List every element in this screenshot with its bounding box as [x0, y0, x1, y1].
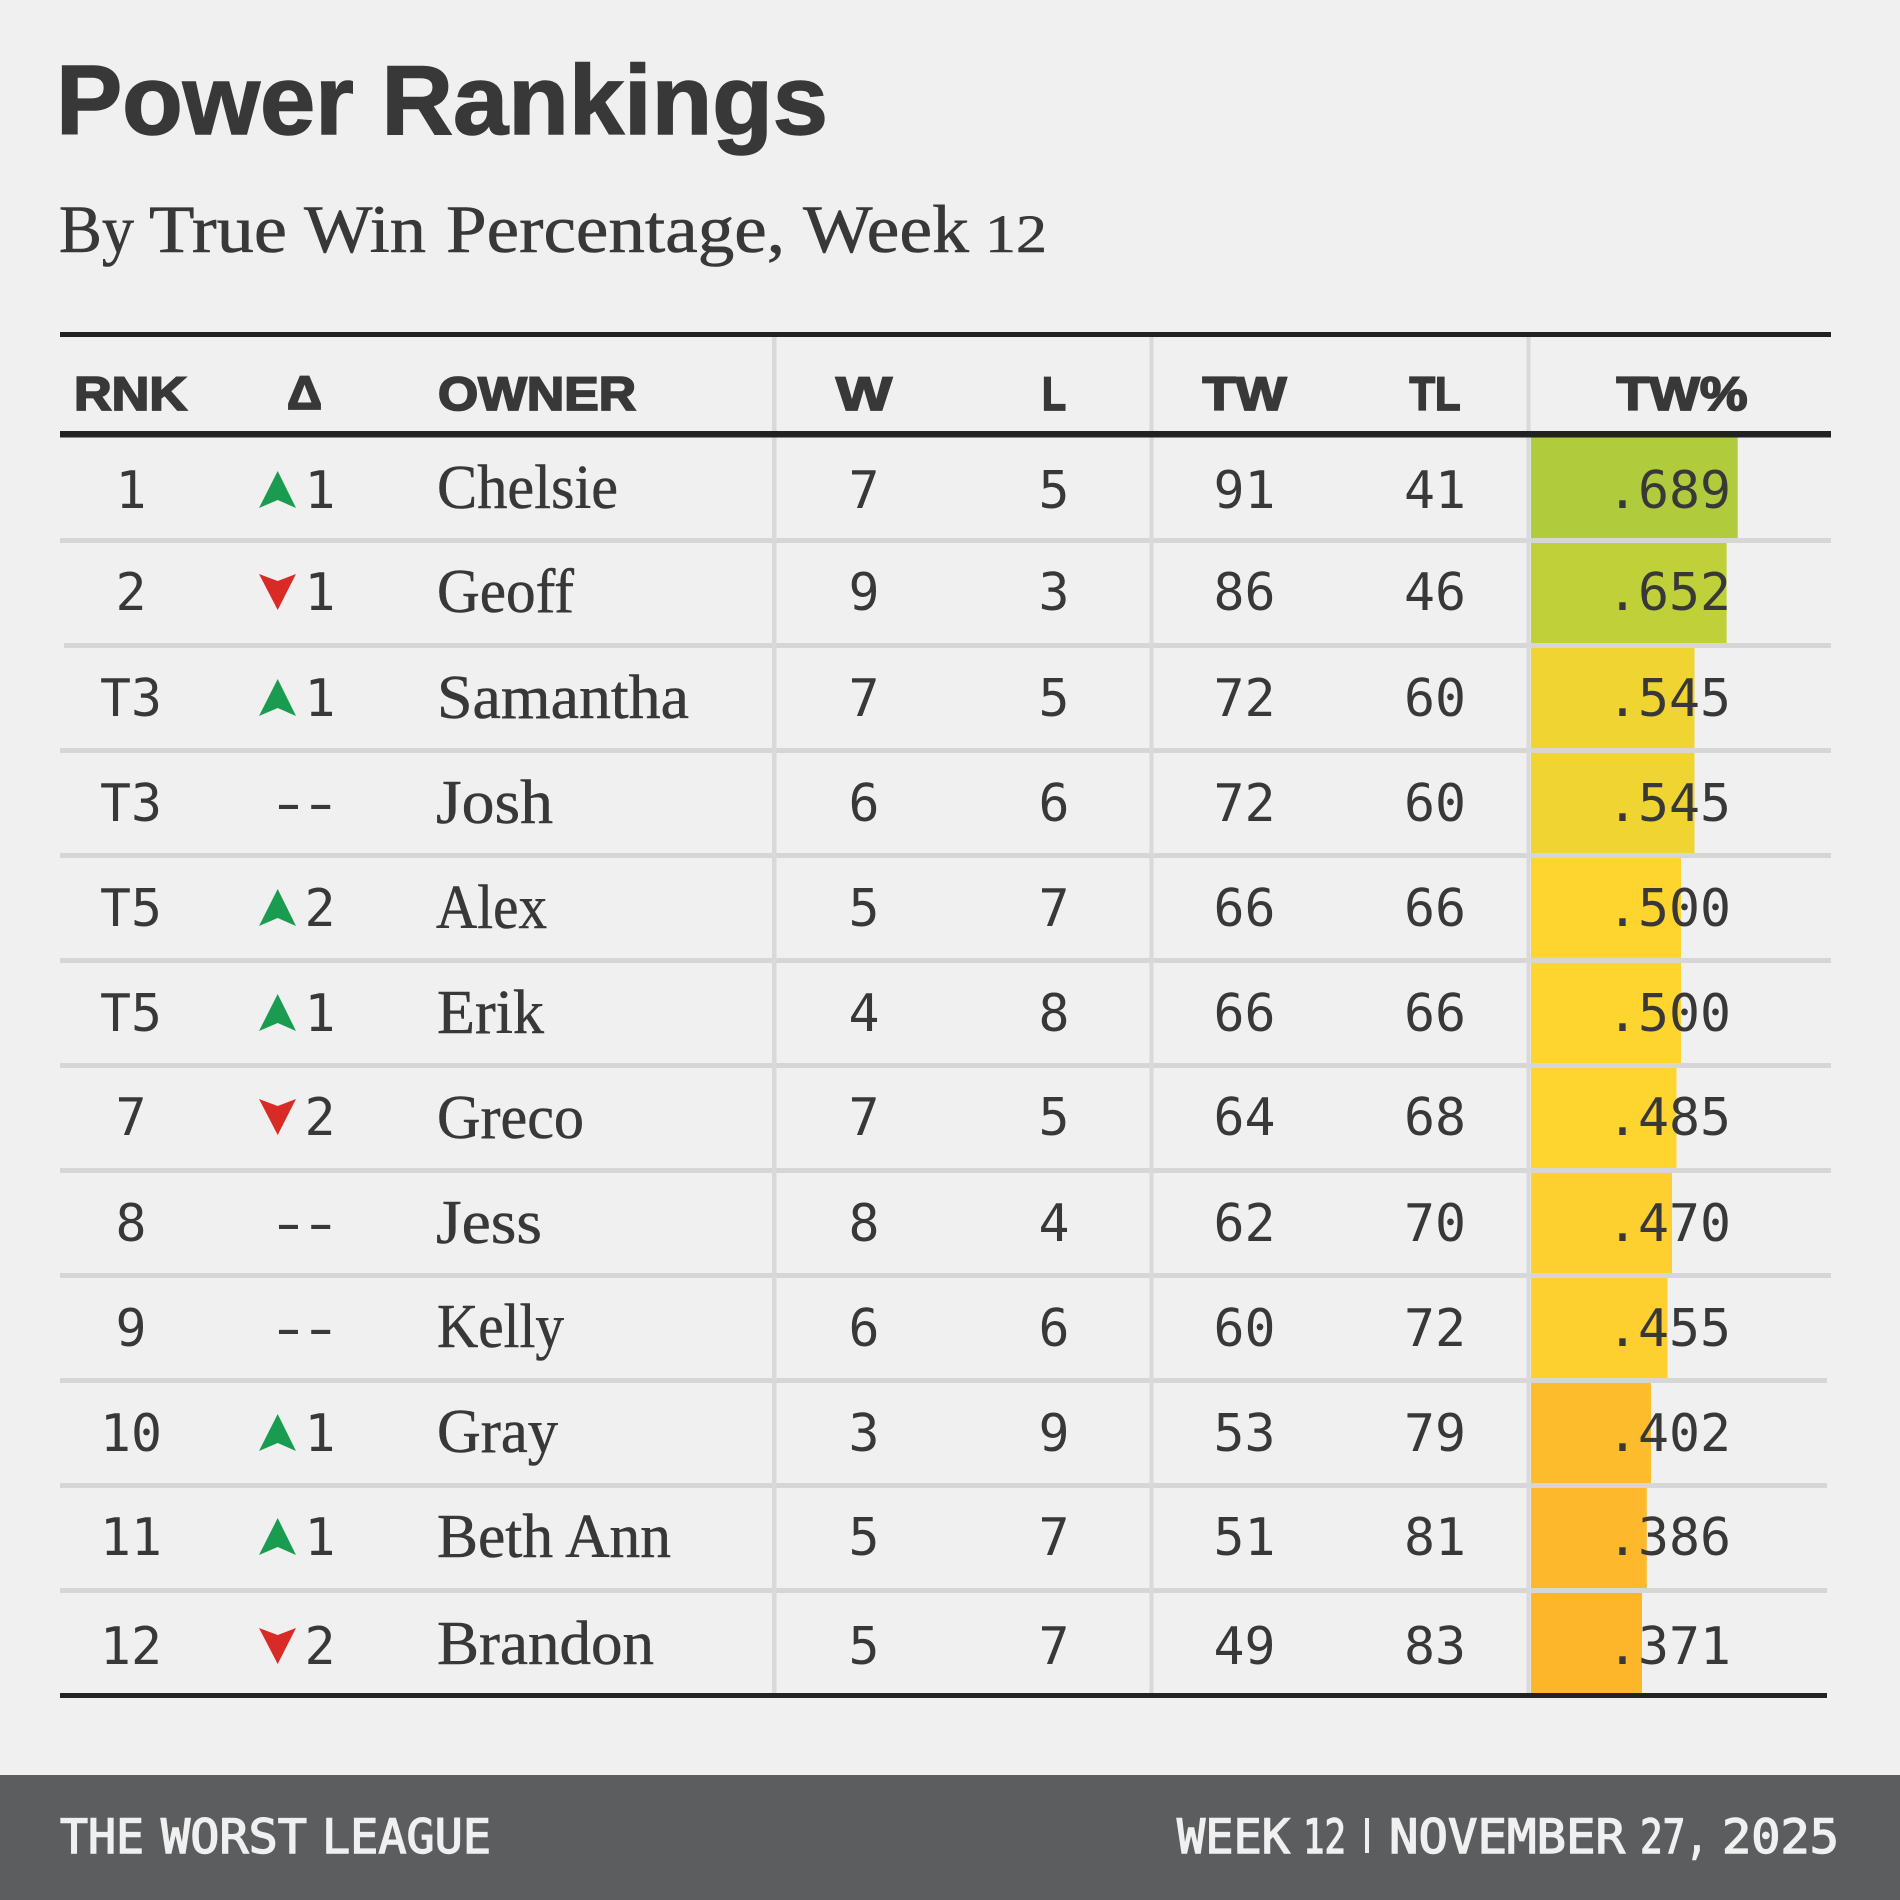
- row 4: Josh: 60: [1404, 774, 1466, 834]
- row 4: Josh: 72: [1213, 774, 1276, 834]
- row 12: Brandon: 49: [1213, 1617, 1276, 1677]
- row 4: Josh: .545: [1607, 774, 1731, 834]
- row 10: Gray: 1: [304, 1404, 336, 1464]
- row 7: Greco: [115, 1068, 1731, 1168]
- row 7: Greco: .485: [1607, 1088, 1731, 1148]
- row 6: Erik: Erik: [437, 979, 544, 1047]
- row 10: Gray: 9: [1038, 1404, 1070, 1464]
- row 2: Geoff: 2: [115, 563, 147, 623]
- row 6: Erik: .500: [1607, 984, 1731, 1044]
- row 7: Greco: 7: [848, 1088, 880, 1148]
- row 8: Jess: 8: [115, 1194, 147, 1254]
- row 7: Greco: Greco: [437, 1084, 584, 1152]
- row 10: Gray: 79: [1404, 1404, 1466, 1464]
- row 9: Kelly: --: [266, 1299, 331, 1359]
- row 5: Alex: T5: [100, 879, 162, 939]
- subtitle: [59, 191, 1047, 267]
- row 4: Josh: 6: [1038, 774, 1070, 834]
- footer date: 12: [1303, 1810, 1346, 1865]
- row 1: Chelsie: 91: [1213, 461, 1276, 521]
- row 3: Samantha: 60: [1404, 669, 1466, 729]
- row 6: Erik: [100, 963, 1731, 1063]
- row 8: Jess: Jess: [436, 1189, 542, 1257]
- row 11: Beth Ann: [100, 1488, 1731, 1588]
- row 3: Samantha: 7: [848, 669, 880, 729]
- row 5: Alex: [100, 858, 1731, 958]
- row 8: Jess: .470: [1607, 1194, 1731, 1254]
- row 1: Chelsie: [115, 438, 1738, 538]
- row 11: Beth Ann: 11: [100, 1508, 162, 1568]
- row 3: Samantha: 1: [304, 669, 336, 729]
- row 2: Geoff: Geoff: [437, 558, 574, 626]
- row 7: Greco: 7: [115, 1088, 147, 1148]
- row 4: Josh: Josh: [436, 769, 553, 837]
- row 2: Geoff: [115, 543, 1731, 643]
- subtitle: Week: [803, 191, 969, 267]
- row 11: Beth Ann: .386: [1607, 1508, 1731, 1568]
- row 9: Kelly: 9: [115, 1299, 147, 1359]
- row 1: Chelsie: Chelsie: [437, 454, 618, 522]
- row 10: Gray: Gray: [437, 1398, 558, 1466]
- footer league name: WORST: [161, 1810, 307, 1865]
- row 10: Gray: .402: [1607, 1404, 1731, 1464]
- row 5: Alex: 66: [1404, 879, 1466, 939]
- row 11: Beth Ann: 5: [848, 1508, 880, 1568]
- row 2: Geoff: 46: [1404, 563, 1466, 623]
- footer bar: [0, 1775, 1900, 1900]
- row 3: Samantha: .545: [1607, 669, 1731, 729]
- footer league name: [60, 1810, 491, 1865]
- table rules: [60, 332, 1831, 1698]
- row 12: Brandon: 12: [100, 1617, 162, 1677]
- row 10: Gray: 10: [100, 1404, 162, 1464]
- row 9: Kelly: 60: [1213, 1299, 1276, 1359]
- table header: [74, 366, 1748, 420]
- row 11: Beth Ann: 7: [1038, 1508, 1070, 1568]
- row 1: Chelsie: 1: [115, 461, 147, 521]
- row 3: Samantha: T3: [100, 669, 162, 729]
- footer date: 2025: [1722, 1810, 1839, 1865]
- title: Power Rankings: [56, 45, 828, 155]
- row 1: Chelsie: 5: [1038, 461, 1070, 521]
- row 8: Jess: --: [266, 1194, 331, 1254]
- row 8: Jess: 4: [1038, 1194, 1070, 1254]
- row 8: Jess: 62: [1213, 1194, 1276, 1254]
- row 4: Josh: --: [266, 774, 331, 834]
- row 6: Erik: 4: [848, 984, 880, 1044]
- row 8: Jess: [115, 1173, 1731, 1273]
- row 3: Samantha: Samantha: [437, 664, 689, 732]
- row 6: Erik: 66: [1404, 984, 1466, 1044]
- row 5: Alex: 66: [1213, 879, 1276, 939]
- subtitle: Percentage,: [446, 191, 785, 267]
- row 3: Samantha: [100, 648, 1731, 748]
- row 5: Alex: .500: [1607, 879, 1731, 939]
- row 8: Jess: 8: [848, 1194, 880, 1254]
- row 10: Gray: [100, 1383, 1731, 1483]
- row 12: Brandon: .371: [1607, 1617, 1731, 1677]
- footer date: [1177, 1810, 1839, 1865]
- row 12: Brandon: Brandon: [437, 1610, 654, 1678]
- row 9: Kelly: [115, 1278, 1731, 1378]
- table header: L: [1042, 367, 1066, 420]
- table header: Δ: [287, 366, 322, 419]
- table header: TW: [1202, 367, 1287, 420]
- row 11: Beth Ann: 81: [1404, 1508, 1466, 1568]
- row 4: Josh: T3: [100, 774, 162, 834]
- row 2: Geoff: .652: [1607, 563, 1731, 623]
- row 12: Brandon: 2: [304, 1617, 336, 1677]
- row 11: Beth Ann: Beth Ann: [437, 1503, 671, 1571]
- row 11: Beth Ann: 1: [304, 1508, 336, 1568]
- row 6: Erik: 1: [304, 984, 336, 1044]
- footer league name: LEAGUE: [322, 1810, 491, 1865]
- row 6: Erik: 8: [1038, 984, 1070, 1044]
- table header: RNK: [74, 367, 187, 420]
- row 9: Kelly: 6: [848, 1299, 880, 1359]
- subtitle: By: [59, 191, 134, 267]
- table header: W: [836, 367, 893, 420]
- row 2: Geoff: 1: [304, 563, 336, 623]
- row 12: Brandon: [100, 1593, 1731, 1693]
- row 2: Geoff: 9: [848, 563, 880, 623]
- row 8: Jess: 70: [1404, 1194, 1466, 1254]
- row 6: Erik: 66: [1213, 984, 1276, 1044]
- row 9: Kelly: 6: [1038, 1299, 1070, 1359]
- row 11: Beth Ann: 51: [1213, 1508, 1276, 1568]
- table header: OWNER: [438, 367, 636, 420]
- row 3: Samantha: 72: [1213, 669, 1276, 729]
- table header: TW%: [1616, 367, 1748, 420]
- row 7: Greco: 2: [304, 1088, 336, 1148]
- row 7: Greco: 68: [1404, 1088, 1466, 1148]
- row 10: Gray: 3: [848, 1404, 880, 1464]
- row 5: Alex: 2: [304, 879, 336, 939]
- row 4: Josh: 6: [848, 774, 880, 834]
- row 5: Alex: 5: [848, 879, 880, 939]
- row 1: Chelsie: 7: [848, 461, 880, 521]
- row 7: Greco: 5: [1038, 1088, 1070, 1148]
- row 9: Kelly: 72: [1404, 1299, 1466, 1359]
- row 7: Greco: 64: [1213, 1088, 1276, 1148]
- row 12: Brandon: 7: [1038, 1617, 1070, 1677]
- subtitle: Win: [304, 191, 426, 267]
- row 4: Josh: [100, 753, 1731, 853]
- table header: TL: [1410, 367, 1460, 420]
- row 10: Gray: 53: [1213, 1404, 1276, 1464]
- row 12: Brandon: 83: [1404, 1617, 1466, 1677]
- row 5: Alex: 7: [1038, 879, 1070, 939]
- row 3: Samantha: 5: [1038, 669, 1070, 729]
- subtitle: 12: [985, 204, 1047, 264]
- row 9: Kelly: .455: [1607, 1299, 1731, 1359]
- row 1: Chelsie: 41: [1404, 461, 1466, 521]
- row 1: Chelsie: 1: [304, 461, 336, 521]
- row 9: Kelly: Kelly: [437, 1293, 564, 1361]
- footer date: WEEK: [1177, 1810, 1291, 1865]
- footer date: NOVEMBER: [1389, 1810, 1626, 1865]
- row 12: Brandon: 5: [848, 1617, 880, 1677]
- footer date: 27,: [1640, 1810, 1708, 1865]
- subtitle: True: [149, 191, 287, 267]
- row 2: Geoff: 86: [1213, 563, 1276, 623]
- row 5: Alex: Alex: [436, 874, 547, 942]
- footer league name: THE: [60, 1810, 144, 1865]
- row 6: Erik: T5: [100, 984, 162, 1044]
- row 2: Geoff: 3: [1038, 563, 1070, 623]
- row 1: Chelsie: .689: [1607, 461, 1731, 521]
